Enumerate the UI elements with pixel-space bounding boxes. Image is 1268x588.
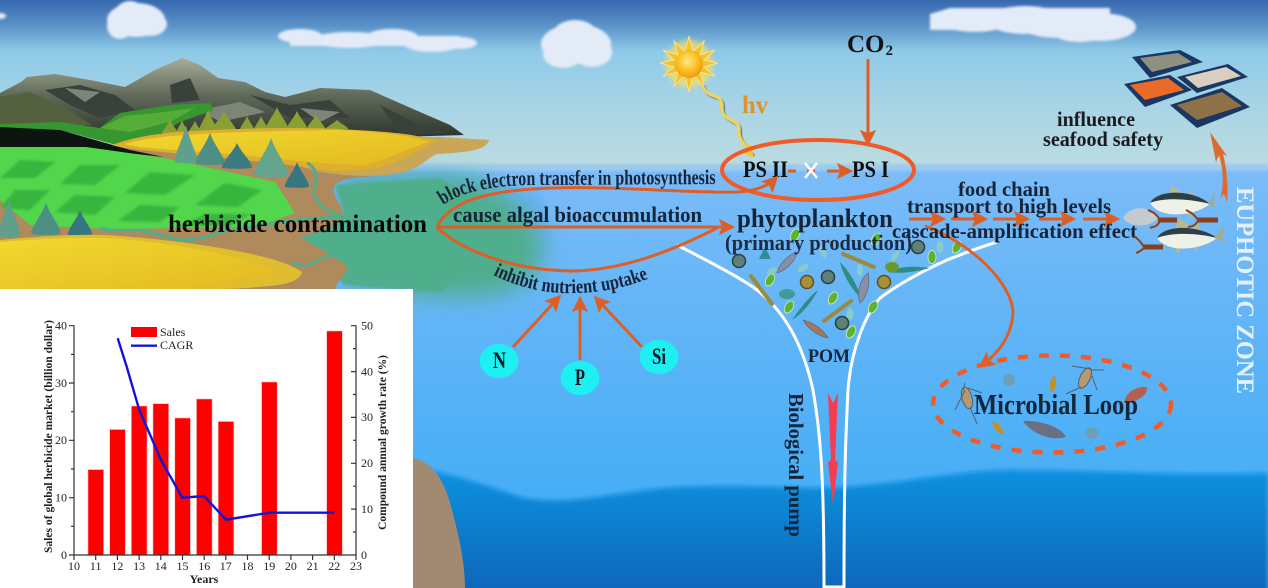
golden round cells [800,276,890,288]
fish and lobsters [1123,186,1226,254]
wavy light ray [702,84,754,158]
lobster 3 [1134,236,1163,253]
arrow: CO2 to PS I [866,59,870,143]
label: hv: hv [742,92,768,119]
label: primary production: (primary production) [725,230,912,255]
pink shell [1124,387,1147,403]
x axis numbers: 19 [263,559,275,573]
left axis numbers [55,318,67,562]
right axis numbers: 20 [361,456,373,470]
x axis numbers: 23 [350,559,362,573]
legend [131,325,193,352]
nutrient: P [560,361,600,395]
label: PS II: PS II [743,157,788,182]
pathway: block electron transfer [437,178,776,227]
sun glow [665,40,713,88]
tributary streams [100,163,345,265]
sun [660,36,718,92]
golden rods [751,254,874,321]
copepod right [1066,366,1104,394]
left axis numbers: 40 [55,318,67,332]
CAGR line [118,338,334,520]
cloud 1 [107,1,167,39]
tray: squid [1177,64,1248,93]
forest [0,103,214,146]
label: influence: influence [1057,107,1135,131]
label: inhibit nutrient uptake: inhibit nutrient uptake [493,263,648,294]
legend: CAGR [160,338,193,352]
nutrient: Si [640,340,678,374]
deep water layer [400,466,1268,588]
x axis numbers [68,559,362,573]
upper yellow field [112,128,436,171]
x axis numbers: 20 [285,559,297,573]
right axis numbers: 30 [361,410,373,424]
nutrient: N: N [493,348,506,373]
x axis numbers: 12 [111,559,123,573]
x axis numbers: 18 [242,559,254,573]
label: herbicide contamination: herbicide contamination [168,211,427,238]
nutrient: Si: Si [652,344,666,369]
rod organisms [991,376,1057,436]
seafood trays [1124,50,1250,128]
sun rays [660,36,718,92]
right axis numbers: 10 [361,502,373,516]
purple pennate cells [777,252,869,338]
arrow: sinking flux [828,393,838,505]
blocked electron transfer [788,163,850,178]
x axis numbers: 14 [155,559,167,573]
label: CO2: 2 [886,43,893,59]
clouds [0,1,1136,68]
funnel: biological pump channel [677,242,997,587]
landscape [0,58,489,289]
arrow: Si [596,298,642,347]
olive blob [885,262,899,272]
right axis title: Compound annual growth rate (%) [375,355,389,530]
label: CO2: CO [847,31,884,58]
nutrient: N [480,344,518,378]
tuna 1 [1150,186,1218,218]
nutrient arrows [513,297,642,360]
right axis numbers: 0 [361,548,367,562]
green field [0,147,295,229]
arrow: N [513,297,559,347]
pale teal cells [765,241,944,320]
left axis numbers: 0 [61,548,67,562]
cloud 2 [278,29,477,52]
patterned protist [1023,421,1066,438]
lobster 1 [1148,210,1177,228]
teal trees [0,125,309,237]
mountains [0,58,464,140]
arrow: P [578,299,582,360]
pathway: nutrient uptake [437,228,717,271]
herbicide plume [300,172,555,305]
label: EUPHOTIC ZONE: EUPHOTIC ZONE [1231,187,1258,394]
blue spheres [1003,374,1098,439]
path for curved label [493,275,650,293]
x axis numbers: 17 [220,559,232,573]
label: Biological pump: Biological pump [784,393,808,537]
sun disc [675,50,703,78]
label: block electron transfer: block electron transfer in photosynthesis [436,170,716,204]
chart panel [0,289,413,588]
label: transport to high levels: transport to high levels [907,194,1111,218]
left axis title: Sales of global herbicide market (billion dollar) [41,320,55,553]
tray: salmon [1124,75,1192,107]
sky background [0,0,1268,170]
cloud edge [0,13,6,19]
x axis numbers: 11 [90,559,101,573]
label: PS I: PS I [852,157,889,182]
label: seafood safety: seafood safety [1043,127,1163,151]
chart background [0,289,413,588]
label: POM: POM [808,346,850,367]
x axis numbers: 15 [176,559,188,573]
arrow: to seafood [1210,132,1228,203]
right axis numbers: 50 [361,318,373,332]
sales bars [88,331,342,555]
tray: fish [1132,50,1203,78]
diatom discs [732,240,924,330]
axes [69,326,356,560]
label: cause algal bioaccumulation: cause algal bioaccumulation [453,202,702,227]
left axis numbers: 10 [55,490,67,504]
dark wedge [0,127,164,157]
left axis numbers: 30 [55,376,67,390]
tray: shellfish [1170,88,1250,128]
rock at sea floor [413,458,465,588]
small silver fish [1123,208,1158,226]
lobster 2 [1186,210,1218,227]
three herbicide pathways [437,178,776,271]
x axis title: Years [190,572,219,586]
right axis numbers [361,318,373,562]
arrow: to microbial loop [925,226,1013,366]
right axis numbers: 40 [361,364,373,378]
x axis numbers: 13 [133,559,145,573]
cloud 4 [930,6,1136,42]
label: food chain: food chain [958,177,1050,201]
left axis numbers: 20 [55,433,67,447]
lower yellow field [0,235,302,289]
x axis numbers: 22 [328,559,340,573]
phytoplankton cells [732,227,964,340]
small olive trees [162,107,348,134]
teal long cells [759,247,930,320]
path for curved label [443,184,720,205]
food chain arrows [909,218,1117,220]
copepod left [955,383,982,424]
pathway: bioaccumulation [437,226,732,228]
nutrient: P: P [575,365,585,390]
shore and ground [0,137,489,289]
dashed boundary [933,356,1171,452]
ocean water [0,164,1268,588]
tuna 2 [1157,218,1226,254]
label: Microbial Loop [974,390,1138,421]
label: phytoplankton: phytoplankton [737,204,894,233]
photosystem ellipse [722,140,914,200]
x axis numbers: 21 [307,559,319,573]
microbial loop [933,356,1171,452]
x axis numbers: 10 [68,559,80,573]
cloud 3 [541,20,612,68]
x axis numbers: 16 [198,559,210,573]
label: cascade-amplification effect: cascade-amplification effect [892,219,1137,243]
legend: Sales [160,325,186,339]
green leaf cells [763,227,964,340]
